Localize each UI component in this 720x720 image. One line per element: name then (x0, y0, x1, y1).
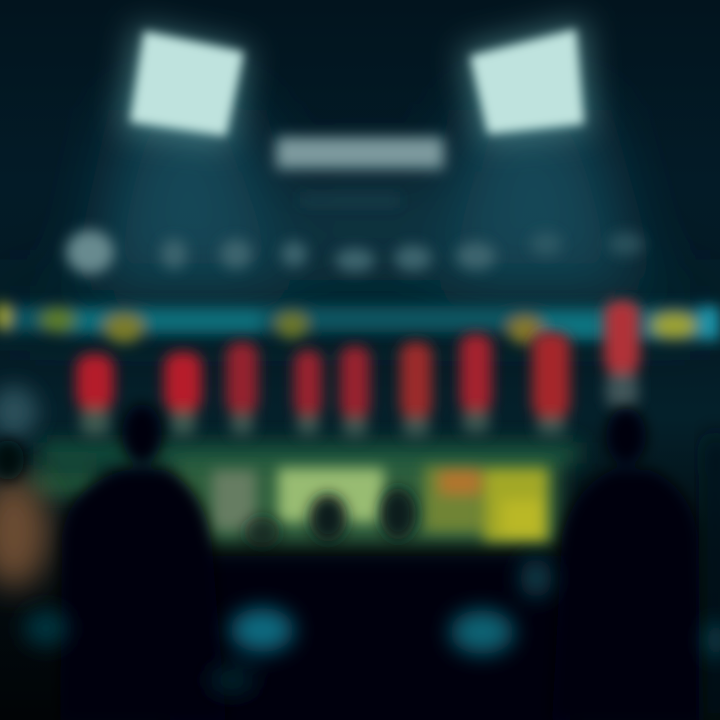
silhouette far right (704, 432, 720, 720)
player 7 (460, 334, 492, 434)
left grey blob (0, 386, 38, 438)
player 3 (226, 342, 258, 436)
coloured banner band (0, 302, 720, 344)
player 2 (164, 352, 202, 436)
player 8 (532, 332, 570, 436)
pitch glow (30, 442, 580, 546)
floodlight right (470, 29, 584, 134)
row of blurred stat labels (66, 230, 644, 274)
small spectator heads (244, 488, 416, 548)
bright pitch screens (212, 466, 548, 542)
player 6 (400, 342, 432, 438)
player 5 (340, 346, 370, 438)
silhouette right (552, 408, 704, 720)
floodlight halo left (120, 25, 250, 145)
teal seat glows (24, 558, 720, 694)
player 9 (604, 300, 640, 408)
silhouette far-left head (0, 440, 24, 480)
player 4 (294, 350, 322, 436)
silhouette left (60, 404, 226, 720)
floodlight left (130, 31, 244, 136)
red players (76, 300, 640, 438)
light beams (0, 110, 720, 330)
scoreboard (276, 137, 444, 204)
lower dark foreground (170, 556, 570, 720)
player 1 (76, 354, 114, 436)
orange spectator left (0, 476, 50, 588)
floodlight halo right (460, 20, 592, 142)
